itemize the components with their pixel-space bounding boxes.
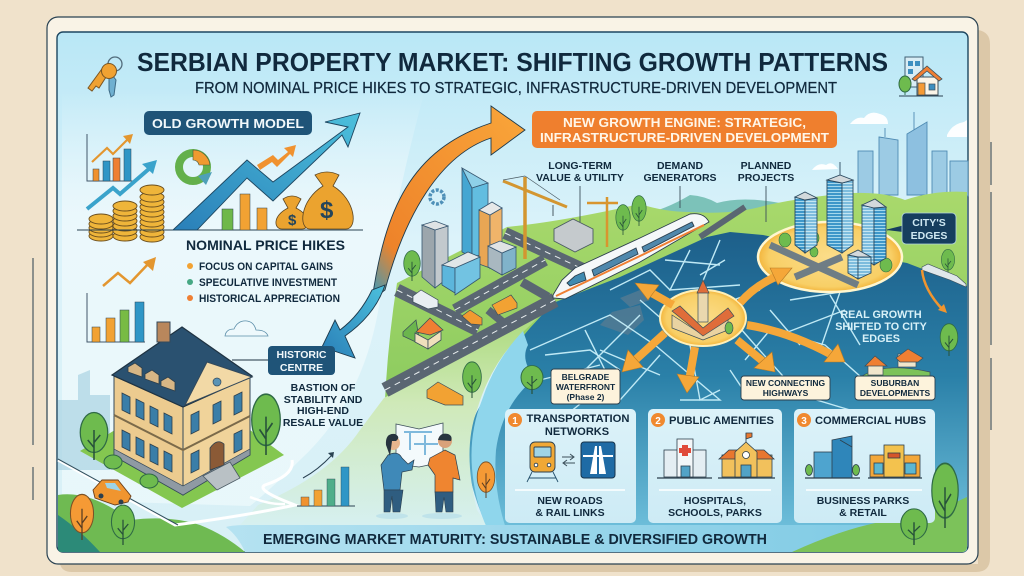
map [396,423,443,467]
heading [526,413,630,438]
label: planned projects: PROJECTS [738,172,794,184]
label: suburban developments [855,376,935,400]
road line [58,459,178,525]
icon: money bags [276,172,353,229]
panel: new growth engine [532,111,837,222]
heading: PUBLIC AMENITIES [669,415,774,427]
tree: centre [463,362,481,398]
tree: small bottom right [901,509,927,545]
bottom band [226,525,967,552]
callout: city's edges: EDGES [911,230,947,242]
roof [112,327,252,407]
chart: nominal price bars [77,194,363,230]
icon: school [718,433,775,478]
list: focus bullets: SPECULATIVE INVESTMENT [199,277,337,289]
caption: & RETAIL [839,507,887,519]
icon: suburban houses [862,349,930,376]
text block: real growth: REAL GROWTH [840,309,922,321]
icon: money bags: $ [320,197,334,224]
icon: pie and arrow [179,150,212,185]
label: long-term value: VALUE & UTILITY [536,172,624,184]
windows [122,392,242,473]
icon: money bags: $ [288,212,297,229]
chart: bottom rising bars [297,452,355,506]
left pale zone [62,90,425,506]
edge roads [770,245,858,285]
panel: old growth model [77,111,363,342]
vehicles [413,290,517,405]
text block: real growth [835,309,928,345]
tree: lower orange [477,462,495,498]
town building [672,280,734,340]
callout: historic centre [232,346,335,375]
man [428,450,460,492]
tree: green bottom-left [111,505,135,545]
panel: transportation networks [505,409,636,523]
clouds [812,113,967,170]
text block: bastion of stability: HIGH-END [297,405,349,417]
steps [203,462,240,490]
illustration: central town with arrows [622,268,845,393]
illustration: central towers [422,168,516,295]
caption: HOSPITALS, [684,495,746,507]
badge: 2: 2 [655,416,661,427]
label: planned projects [738,160,794,222]
callout: historic centre: HISTORIC [277,349,327,361]
tree: right of label [940,324,958,356]
tree: right of building [252,394,280,455]
heading: COMMERCIAL HUBS [815,415,926,427]
icon: keys [88,57,122,97]
arrow heads [622,268,845,393]
tree: left of belgrade [521,366,543,394]
heading: footer message: EMERGING MARKET MATURITY: SUSTAINABLE & DIVERSIFIED GROWTH [263,531,767,548]
left bottom hill [58,494,245,552]
arrow: blue rising [87,160,157,209]
label: planned projects: PLANNED [741,160,792,172]
label: long-term value [536,160,624,222]
text block: real growth: SHIFTED TO CITY [835,321,928,333]
arrow: small orange [257,145,296,170]
right wall [183,376,250,495]
construction block [554,219,593,252]
river [471,331,535,552]
cornice [114,415,250,450]
label: new connecting highways: HIGHWAYS [763,388,809,398]
caption [668,495,762,519]
callout: historic centre: CENTRE [280,362,323,374]
tower C [862,205,874,265]
teal hills [640,195,790,225]
label: suburban developments: SUBURBAN [871,378,919,388]
icon: train [527,442,558,482]
plinth [114,449,250,495]
side marks [33,142,991,500]
tree: large bottom right [932,463,958,528]
left wall [114,376,183,495]
grass [80,430,284,508]
label: new connecting highways [741,376,830,400]
skyline [858,112,968,196]
heading: subtitle: FROM NOMINAL PRICE HIKES TO STRATEGIC, INFRASTRUCTURE-DRIVEN DEVELOPMENT [195,80,837,97]
heading: TRANSPORTATION [526,413,630,425]
chart: mini bars and arrow [87,134,133,181]
chart: second mini bars [87,257,156,342]
road network [385,207,745,390]
road: white path [58,460,295,525]
callout: city's edges: CITY'S [912,217,946,229]
caption [535,495,605,519]
caption: & RAIL LINKS [535,507,605,519]
label: suburban developments: DEVELOPMENTS [860,388,931,398]
callout: city's edges [887,213,956,244]
grey tower [422,225,435,288]
orange tower [479,210,490,268]
badge: 3 [797,413,811,427]
heading: title: SERBIAN PROPERTY MARKET: SHIFTING GROWTH PATTERNS [137,47,888,77]
illustration: edge district glow [758,222,902,292]
tree: behind train [632,196,646,226]
label: belgrade waterfront [551,369,620,404]
woman [381,453,414,490]
panel: commercial hubs [794,409,935,523]
icon: gear [430,190,444,204]
illustration: two people with map [376,423,462,519]
badge: new growth [532,111,837,148]
text block: bastion of stability: BASTION OF [291,382,356,394]
label: demand generators: DEMAND [657,160,703,172]
icon: exchange arrows [562,454,575,466]
icon: retail [868,445,922,478]
icon: office towers [805,436,860,478]
icon: cloud [225,321,268,336]
green land [385,192,967,400]
tower B [827,180,842,253]
grey block [488,246,502,275]
badge: new growth: INFRASTRUCTURE-DRIVEN DEVELOPMENT [540,131,829,145]
illustration: small train [922,264,966,287]
icon: small house [403,318,443,349]
icon: crane right [587,197,618,247]
street map lines [530,240,870,420]
icon: highway sign [581,442,615,478]
caption: SCHOOLS, PARKS [668,507,762,519]
tower A [795,197,805,253]
arrow: large blue growth arrow [173,113,360,230]
label: belgrade waterfront: (Phase 2) [567,392,605,402]
chimney [157,322,170,342]
text block: real growth: EDGES [862,333,900,345]
text block: bastion of stability: RESALE VALUE [283,417,363,429]
arrows [633,275,832,381]
caption [817,495,909,519]
illustration: historic building [80,322,284,508]
badge: old growth model: OLD GROWTH MODEL [152,116,304,131]
glow [660,290,746,346]
icon: crane left [503,176,567,259]
badge: 1: 1 [512,416,518,427]
label: belgrade waterfront: BELGRADE [562,372,610,382]
label: demand generators: GENERATORS [643,172,717,184]
icon: hospital [657,439,712,478]
lower pale land [240,303,553,525]
illustration: high-speed train [553,214,709,299]
left hazy skyline [58,370,110,470]
text block: bastion of stability: STABILITY AND [284,394,363,406]
illustration: edge towers [795,162,886,279]
shrubs [104,455,122,469]
badge: new growth: NEW GROWTH ENGINE: STRATEGIC, [563,116,806,130]
divider line [659,489,771,491]
badge: old growth model [144,111,312,135]
heading: nominal price hikes: NOMINAL PRICE HIKES [186,237,345,253]
tree: far right upper [941,249,955,274]
right bottom hill [792,497,967,552]
arrow: small orange edge [922,270,947,313]
list: focus bullets: HISTORICAL APPRECIATION [199,293,340,305]
map water [466,232,967,552]
tower D [848,255,858,279]
label: belgrade waterfront: WATERFRONT [556,382,616,392]
caption: BUSINESS PARKS [817,495,909,507]
tree: right of cranes [616,205,630,235]
door [210,442,224,470]
divider line [806,489,922,491]
tall blue tower [462,168,472,257]
divider line [515,489,625,491]
dormers [128,363,175,391]
ground shadows [376,513,408,519]
badge: 3: 3 [801,416,807,427]
label: long-term value: LONG-TERM [548,160,612,172]
label: new connecting highways: NEW CONNECTING [746,378,826,388]
panel: public amenities [648,409,782,523]
tree: upper left [404,251,420,281]
list: focus bullets: FOCUS ON CAPITAL GAINS [199,261,333,273]
tree: orange left [70,494,94,540]
grey districts [600,290,650,335]
text block: bastion of stability [283,382,363,429]
icon: house and office [899,57,943,96]
icon: orange car [93,480,131,505]
gable [185,362,252,405]
label: demand generators [643,160,717,208]
tree: left of building [80,412,108,460]
list: focus bullets [187,261,340,305]
arrow: large orange curved [372,106,525,300]
icon: coin stacks [89,185,164,242]
heading: NETWORKS [545,426,609,438]
arrow: blue curved [322,285,385,358]
caption: NEW ROADS [537,495,603,507]
glass block [442,265,455,293]
arrow: white path arrow [250,497,285,504]
edge shrubs [779,232,892,272]
